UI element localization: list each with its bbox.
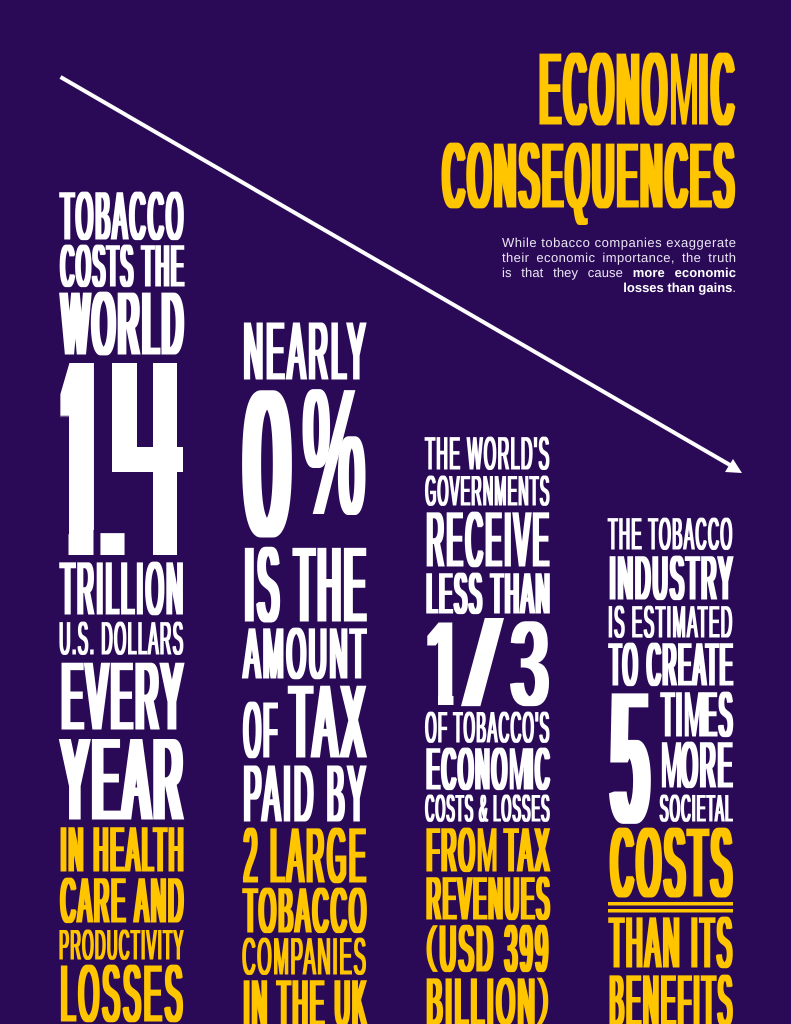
infographic canvas: NEARLY xyxy=(244,304,369,398)
infographic canvas: IC xyxy=(528,736,552,802)
column 3 yellow statement xyxy=(425,816,552,1024)
infographic canvas: THE WORLD'S xyxy=(425,426,551,480)
column 1 yellow statement xyxy=(59,814,186,1024)
infographic canvas: U.S. DOLLARS xyxy=(59,612,185,664)
column 4 white statement: 5 xyxy=(612,653,648,862)
infographic canvas: % xyxy=(303,352,365,553)
column 4 white statement: TI xyxy=(662,678,684,750)
infographic canvas: COSTS THE xyxy=(61,232,186,300)
column 2 yellow statement xyxy=(242,812,369,1024)
column 3 yellow statement: ( xyxy=(425,916,437,972)
title: M xyxy=(669,32,699,146)
column 3 yellow statement: FRO xyxy=(427,816,477,886)
column 1: 1.4 trillion xyxy=(50,178,191,1024)
column 2: nearly 0% tax xyxy=(242,304,369,1024)
infographic canvas: AMOUNT xyxy=(244,614,369,694)
column 4 white statement: M xyxy=(684,678,704,750)
column 4 white statement xyxy=(608,508,735,862)
infographic canvas: PRODUCTIVITY xyxy=(59,922,185,970)
column 2 white statement: 0 xyxy=(245,348,289,580)
intro text block: is that they cause more economic xyxy=(502,265,736,280)
infographic canvas: 2 LARGE xyxy=(244,812,369,900)
column 3: less than 1/3 xyxy=(418,426,552,1024)
title xyxy=(443,32,737,228)
column 3 yellow statement: ) xyxy=(538,969,550,1024)
infographic canvas: IN HEALTH xyxy=(61,814,186,886)
intro text block xyxy=(502,235,736,295)
infographic canvas: TOBACCO xyxy=(244,874,369,946)
infographic canvas: COMPANIES xyxy=(242,928,368,986)
infographic canvas: TAX xyxy=(505,816,552,886)
infographic canvas: YEAR xyxy=(62,714,187,844)
column 4 yellow statement xyxy=(608,808,735,1024)
infographic canvas: IS THE xyxy=(245,524,369,644)
intro text block: their economic importance, the truth xyxy=(502,250,736,265)
column 2 white statement xyxy=(244,304,369,840)
infographic canvas: CARE AND xyxy=(61,864,186,936)
column 2 white statement: OF xyxy=(244,686,280,774)
column 3 white statement: / xyxy=(466,597,500,731)
infographic canvas: TAX xyxy=(290,664,369,780)
column 1 white statement xyxy=(50,178,191,844)
column 4 white statement: M xyxy=(661,728,682,802)
infographic canvas: EVERY xyxy=(62,642,186,750)
infographic canvas: PAID BY xyxy=(244,748,369,840)
column 1 white statement: . xyxy=(89,370,136,599)
infographic canvas: USD 399 xyxy=(440,912,551,986)
infographic canvas: ECONO xyxy=(427,736,509,802)
infographic canvas: TRILLION xyxy=(61,546,186,632)
column 3 white statement: M xyxy=(509,736,529,802)
column 3 white statement: 3 xyxy=(512,597,548,731)
column 1 white statement: 1 xyxy=(65,303,96,615)
column 3 yellow statement: M xyxy=(477,816,498,886)
infographic canvas: 4 xyxy=(134,303,178,615)
arrow: descending diagonal xyxy=(60,77,742,473)
infographic canvas: TOBACCO xyxy=(61,178,186,254)
column 3 white statement: 1 xyxy=(425,597,463,731)
column 4: 5 times more costs xyxy=(608,508,735,1024)
intro text block: losses than gains. xyxy=(623,280,736,295)
infographic canvas: WORLD xyxy=(62,274,186,374)
column 3 white statement xyxy=(418,426,552,830)
intro text block: While tobacco companies exaggerate xyxy=(502,235,736,250)
